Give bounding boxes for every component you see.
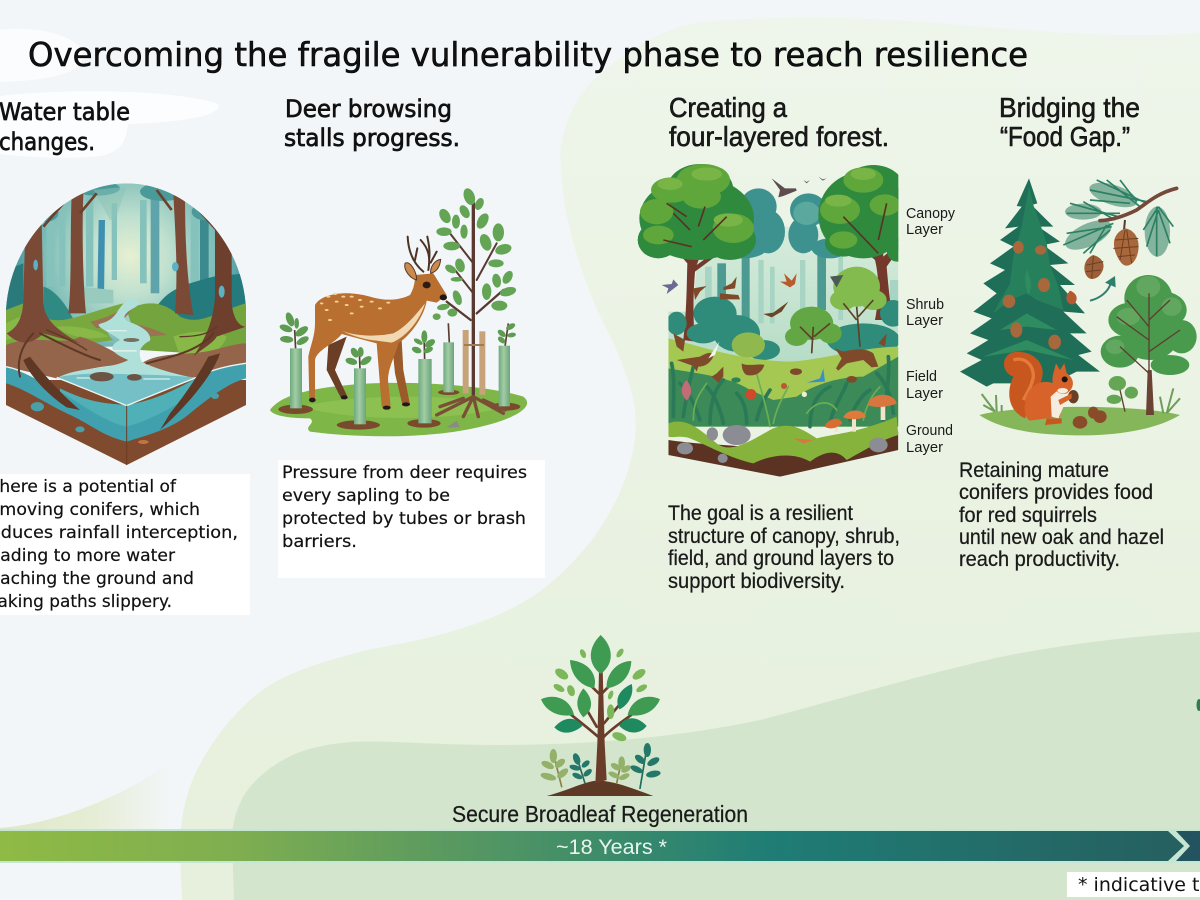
body text: retaining conifers: until new oak and hazel (959, 526, 1164, 549)
layer labels: Layer (906, 221, 943, 238)
heading: deer browsing: stalls progress. (284, 124, 460, 152)
meadow (668, 338, 898, 427)
body text: retaining conifers: reach productivity. (959, 548, 1120, 571)
teal canopies (720, 188, 848, 258)
icon: regeneration tree (540, 635, 661, 796)
field plants (672, 357, 893, 427)
text box: pressure from deer (278, 460, 545, 578)
heading: deer browsing: Deer browsing (285, 95, 452, 123)
big trunks (7, 220, 80, 343)
text box: pressure from deer: barriers. (282, 532, 357, 552)
deer (308, 237, 447, 410)
squirrel (1004, 352, 1079, 425)
background trees and mist (668, 227, 898, 367)
column 2: deer browsing (270, 95, 545, 578)
heading: four-layered forest: Creating a (669, 92, 787, 123)
main sapling (447, 203, 503, 397)
text box: pressure from deer: protected by tubes or brash (282, 509, 526, 529)
grass tufts (982, 388, 1180, 413)
body text: resilient structure: structure of canopy, shrub, (668, 525, 900, 548)
illustration: forest stream cross-section (0, 180, 253, 470)
white highlight behind title (0, 29, 83, 82)
heading: water table (0, 98, 130, 156)
body text: resilient structure (668, 502, 900, 593)
layer labels (906, 205, 955, 456)
left tree (638, 164, 756, 342)
ground animals (673, 333, 887, 383)
heading: four-layered forest: four-layered forest. (669, 121, 889, 152)
tubes (290, 348, 302, 408)
body text: resilient structure: field, and ground layers to (668, 547, 894, 570)
body text: retaining conifers (959, 459, 1164, 571)
soil front (6, 380, 246, 465)
soil (668, 432, 898, 480)
birds (662, 177, 843, 317)
field foliage base (668, 357, 898, 427)
oak tree (1101, 275, 1197, 415)
water table band (6, 363, 246, 442)
body text: retaining conifers: conifers provides food (959, 481, 1153, 504)
right tree (818, 165, 898, 320)
white highlight behind first heading (0, 91, 219, 158)
heading: food gap: “Food Gap.” (1000, 121, 1130, 152)
body text: resilient structure: The goal is a resilient (668, 502, 853, 525)
pine cones (1114, 228, 1139, 266)
layer labels: Field (906, 368, 937, 385)
layer labels: Layer (906, 439, 943, 456)
layer labels: Ground (906, 422, 953, 439)
column 1: water table changes (0, 98, 253, 615)
moss (6, 303, 124, 345)
soil banks (6, 337, 130, 378)
stakes (463, 330, 469, 393)
moss (668, 417, 898, 463)
illustration: deer and protected saplings (270, 187, 527, 436)
caption: secure broadleaf regeneration: Secure Broadleaf Regeneration (452, 801, 748, 827)
tree stems in tubes (295, 323, 508, 370)
heading: food gap: Bridging the (999, 92, 1140, 123)
heading: deer browsing (284, 95, 460, 152)
background layer: mid green hill (232, 632, 1200, 900)
rocks (677, 425, 888, 463)
fir tree (960, 178, 1100, 387)
lower forest scene (667, 267, 907, 480)
ground (979, 407, 1180, 435)
column 3: four-layered forest (638, 92, 955, 593)
layer labels: Layer (906, 385, 943, 402)
dark bushes (6, 264, 24, 310)
mushrooms (793, 395, 897, 443)
timeline arrow bar (0, 829, 1200, 863)
layer labels: Canopy (906, 205, 955, 222)
text box: pressure from deer: every sapling to be (282, 486, 450, 506)
ground (270, 383, 527, 436)
acorns (1073, 407, 1107, 429)
pine branch (1061, 178, 1177, 304)
layer labels: Layer (906, 312, 943, 329)
roots / brash (437, 397, 505, 417)
heading: food gap (999, 92, 1140, 152)
text box: pressure from deer: Pressure from deer requires (282, 463, 527, 483)
seedlings (553, 745, 647, 788)
roots (23, 357, 80, 410)
body text: retaining conifers: for red squirrels (959, 504, 1097, 527)
column 4: bridging the food gap (959, 92, 1197, 571)
body text: retaining conifers: Retaining mature (959, 459, 1109, 482)
arrow (1090, 276, 1116, 301)
layer labels: Shrub (906, 296, 944, 313)
heading: water table: Water table (0, 98, 130, 126)
soil (278, 390, 520, 430)
title: Overcoming the fragile vulnerability phase to reach resilience (28, 35, 1028, 74)
heading: four-layered forest (669, 92, 889, 152)
body text: resilient structure: support biodiversity. (668, 570, 845, 593)
clipped icon at right edge (1196, 699, 1200, 711)
stream (57, 299, 197, 405)
text box: potential of removing conifers (0, 474, 250, 615)
background layer: left green bump (0, 760, 172, 832)
label: 18 years: ~18 Years * (556, 836, 667, 859)
heading: water table: changes. (0, 128, 95, 156)
mid bushes (667, 297, 907, 360)
illustration: layered forest (638, 164, 908, 480)
illustration: fir, squirrel and oak (960, 178, 1197, 435)
